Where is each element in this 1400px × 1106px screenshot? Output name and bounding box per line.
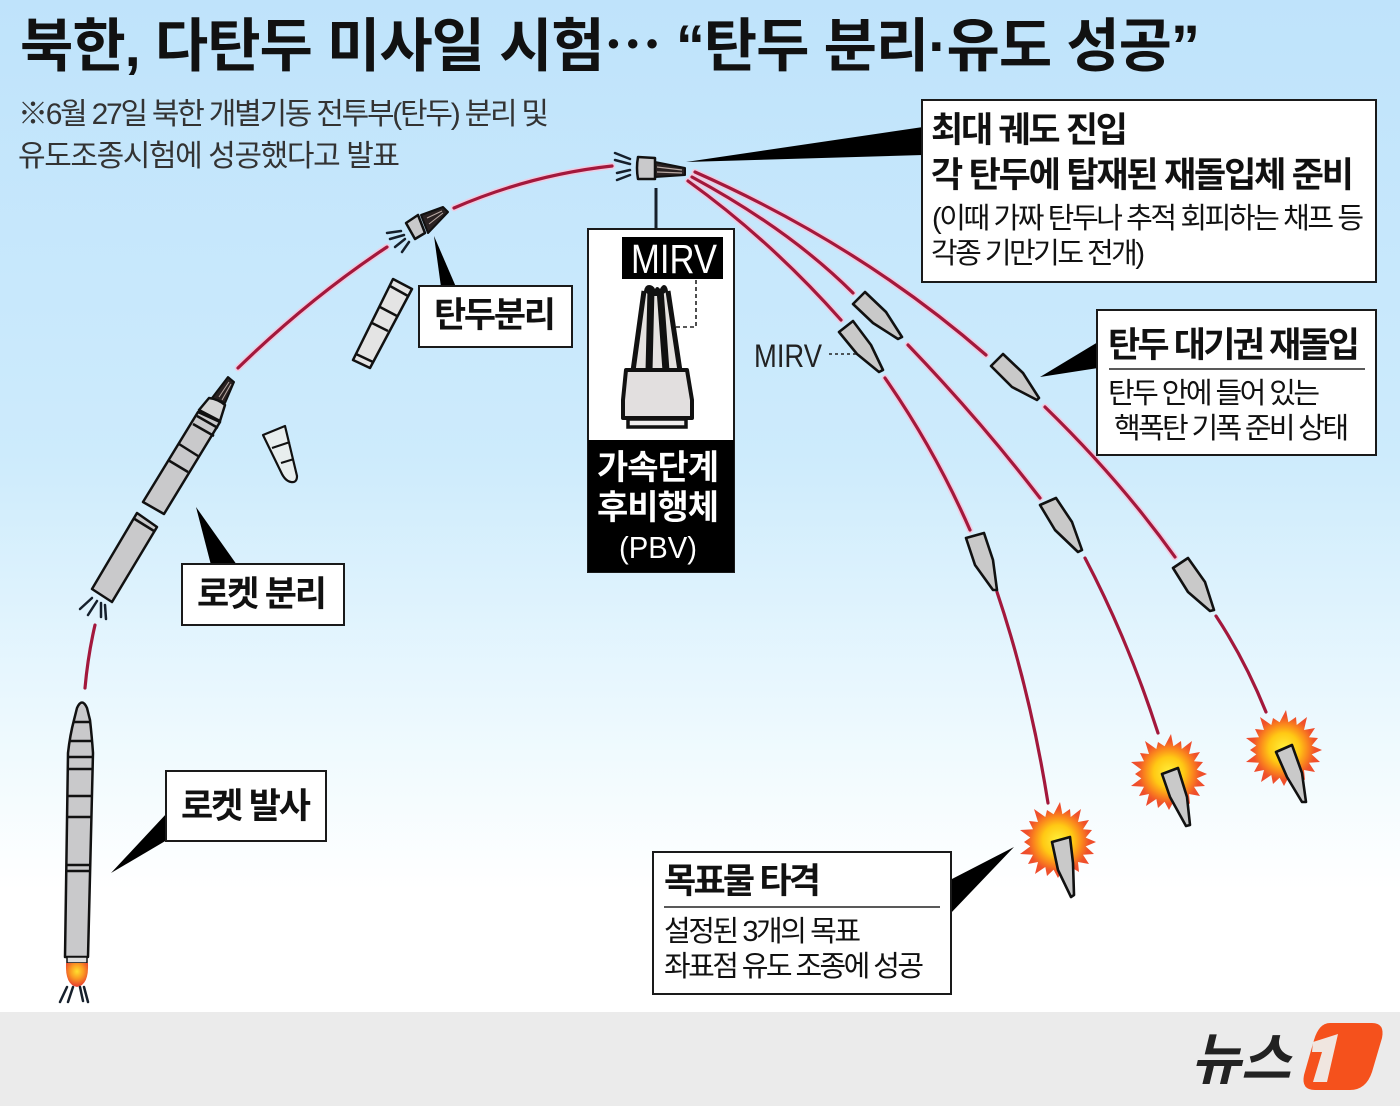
- callout: rocket launch: [111, 771, 326, 873]
- callout: rocket separation: [182, 507, 344, 625]
- discarded second stage: [353, 279, 412, 368]
- separated lower stage: [80, 513, 157, 619]
- explosion 2: [1131, 734, 1207, 826]
- callout: target strike: 목표물 타격: [664, 862, 821, 901]
- dashed leader: [670, 280, 696, 327]
- callout: warhead separation: [419, 236, 572, 347]
- icon: MIRV warheads on bus: [623, 285, 692, 427]
- title: 북한, 다탄두 미사일 시험⋯ “탄두 분리·유도 성공”: [20, 14, 1200, 79]
- explosion 1: [1020, 802, 1096, 897]
- MIRV label: MIRV: [631, 236, 718, 282]
- flying warheads: [839, 292, 1214, 611]
- panel: PBV: [588, 229, 734, 572]
- subtitle note: 유도조종시험에 성공했다고 발표: [18, 140, 400, 173]
- separating rocket, upper stage: [143, 377, 234, 514]
- callout: re-entry: 탄두 안에 들어 있는: [1108, 378, 1320, 410]
- discarded nose fairing: [263, 426, 297, 482]
- subtitle note: ※6월 27일 북한 개별기동 전투부(탄두) 분리 및: [18, 98, 549, 131]
- warhead trajectories: [688, 172, 1266, 803]
- callout: target strike: 좌표점 유도 조종에 성공: [664, 951, 924, 983]
- callout: re-entry: 핵폭탄 기폭 준비 상태: [1114, 413, 1349, 445]
- PBV caption: 후비행체: [597, 489, 719, 527]
- footer band: [0, 1012, 1400, 1106]
- callout: re-entry: 탄두 대기권 재돌입: [1108, 326, 1360, 365]
- callout: re-entry: [1040, 310, 1376, 455]
- explosion 3: [1246, 710, 1322, 802]
- callout: warhead separation: 탄두분리: [434, 296, 556, 335]
- logo: News1: [1191, 1023, 1383, 1091]
- callout: max orbit: 각종 기만기도 전개): [931, 238, 1145, 270]
- callout: max orbit: [686, 100, 1376, 282]
- callout: max orbit: (이때 가짜 탄두나 추적 회피하는 채프 등: [932, 202, 1364, 235]
- callout: max orbit: 최대 궤도 진입: [931, 111, 1128, 150]
- launch rocket: [60, 702, 93, 1002]
- callout: target strike: 설정된 3개의 목표: [664, 916, 861, 948]
- PBV caption: 가속단계: [597, 449, 719, 487]
- callout: rocket separation: 로켓 분리: [197, 575, 327, 614]
- callout: rocket launch: 로켓 발사: [181, 787, 311, 826]
- logo: News1: 뉴스: [1191, 1028, 1293, 1091]
- warhead bus at separation: [387, 207, 448, 252]
- PBV caption: (PBV): [619, 530, 697, 565]
- connector to PBV panel: [654, 188, 658, 228]
- MIRV side label: MIRV: [754, 338, 823, 374]
- ascent trajectory: [85, 166, 612, 688]
- warhead bus at apogee: [615, 153, 685, 180]
- PBV caption: [597, 449, 719, 565]
- subtitle note: [18, 98, 549, 173]
- icon: rocket flame: [66, 963, 88, 987]
- callout: max orbit: 각 탄두에 탑재된 재돌입체 준비: [931, 156, 1354, 195]
- callout: target strike: [653, 847, 1014, 994]
